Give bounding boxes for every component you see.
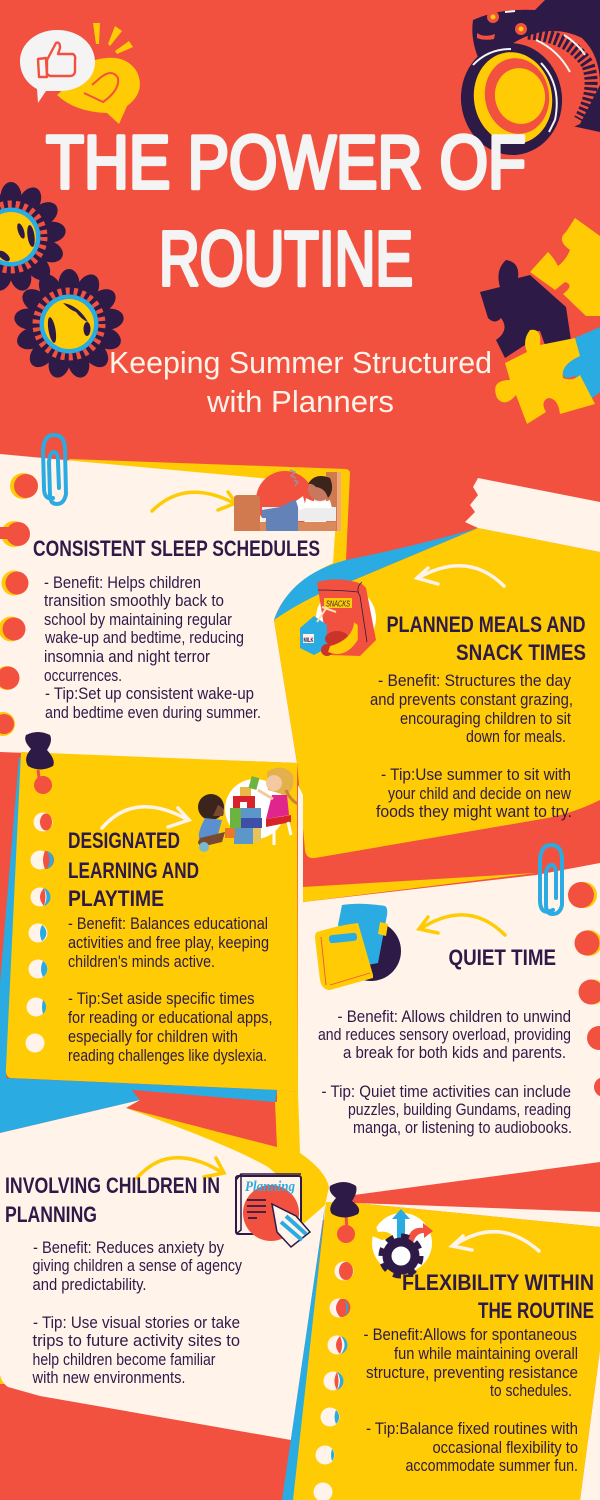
cream sheet xyxy=(0,1100,325,1440)
body text xyxy=(68,915,272,1065)
icon: planning notebook: Planning xyxy=(245,1179,295,1195)
red ribbon xyxy=(126,1090,277,1147)
body text: manga, or listening to audiobooks. xyxy=(353,1119,572,1137)
panel: consistent sleep schedules xyxy=(0,435,350,763)
body text: - Benefit: Helps children xyxy=(44,574,201,592)
body text: fun while maintaining overall xyxy=(394,1345,578,1363)
arrow xyxy=(102,807,189,828)
body text: insomnia and night terror xyxy=(44,648,210,666)
yellow corner sliver xyxy=(0,1370,5,1384)
body text: help children become familiar xyxy=(32,1351,216,1369)
title: ROUTINE xyxy=(159,216,413,302)
blue edge xyxy=(0,757,22,1080)
body text xyxy=(370,672,573,821)
body text: for reading or educational apps, xyxy=(68,1009,272,1027)
body text: - Benefit: Balances educational xyxy=(68,915,268,933)
body text: and bedtime even during summer. xyxy=(45,704,261,722)
icon: flower left xyxy=(0,182,67,293)
icon: puzzle pieces xyxy=(480,218,600,424)
body text: wake-up and bedtime, reducing xyxy=(44,629,244,647)
body text: giving children a sense of agency xyxy=(32,1257,243,1275)
panel: quiet time xyxy=(298,785,600,1220)
body text: reading challenges like dyslexia. xyxy=(68,1047,267,1065)
icon: snack bag and milk xyxy=(300,579,376,656)
body text: - Benefit: Structures the day xyxy=(378,672,572,690)
body text: occasional flexibility to xyxy=(432,1439,578,1457)
panel backing xyxy=(69,459,350,600)
icon: flower lower xyxy=(13,269,125,380)
body text: - Tip:Balance fixed routines with xyxy=(366,1420,578,1438)
tape xyxy=(465,478,600,552)
icon: gear with arrows xyxy=(372,1209,433,1276)
body text: - Tip: Use visual stories or take xyxy=(33,1314,240,1332)
body text: - Benefit: Reduces anxiety by xyxy=(33,1239,225,1257)
arrow xyxy=(152,492,236,511)
blue ribbon xyxy=(0,1078,277,1133)
icon: snack bag and milk: MILK xyxy=(304,637,314,644)
cream sheet xyxy=(298,785,600,1220)
body text: especially for children with xyxy=(68,1028,238,1046)
body text xyxy=(364,1326,578,1475)
body text: - Tip:Set aside specific times xyxy=(68,990,254,1008)
body text xyxy=(44,574,261,722)
arrow xyxy=(419,915,505,935)
body text xyxy=(32,1239,243,1387)
icon: pushpin xyxy=(330,1182,359,1243)
subtitle: Keeping Summer Structured xyxy=(109,345,492,380)
arrow xyxy=(452,1232,539,1251)
heading xyxy=(68,828,199,911)
yellow strip xyxy=(303,873,536,902)
binding holes xyxy=(26,812,54,1052)
body text: school by maintaining regular xyxy=(44,611,232,629)
arrow xyxy=(417,566,504,586)
body text: with new environments. xyxy=(32,1369,186,1387)
body text: foods they might want to try. xyxy=(376,803,572,821)
body text: activities and free play, keeping xyxy=(68,934,269,952)
body text: and predictability. xyxy=(32,1276,146,1294)
body text: structure, preventing resistance xyxy=(366,1364,578,1382)
arrow xyxy=(137,1158,224,1178)
heading: INVOLVING CHILDREN IN xyxy=(5,1173,220,1198)
icon: paperclip xyxy=(540,845,562,914)
icon: thumbs up and heart speech bubbles xyxy=(20,23,140,124)
body text: encouraging children to sit xyxy=(400,710,571,728)
heading xyxy=(402,1270,594,1323)
icon: camera xyxy=(455,0,600,160)
body text: down for meals. xyxy=(466,728,566,746)
body text: and prevents constant grazing, xyxy=(370,691,573,709)
subtitle: with Planners xyxy=(206,384,394,419)
icon: pushpin xyxy=(25,732,54,794)
icon: books xyxy=(315,904,401,990)
heading: PLANNING xyxy=(5,1202,97,1227)
binding holes xyxy=(314,1262,354,1500)
body text xyxy=(318,1008,572,1137)
cream corner xyxy=(580,1350,600,1500)
body text: - Tip: Quiet time activities can include xyxy=(322,1083,571,1101)
paper sheet xyxy=(0,454,338,763)
body text: a break for both kids and parents. xyxy=(343,1044,566,1062)
body text: children's minds active. xyxy=(68,953,215,971)
icon: sleeping child xyxy=(234,470,341,531)
panel: involving children in planning xyxy=(0,1078,329,1440)
icon: planning notebook xyxy=(236,1174,310,1247)
title xyxy=(46,120,526,302)
heading: PLAYTIME xyxy=(68,886,164,911)
body text: - Benefit: Allows children to unwind xyxy=(338,1008,571,1026)
heading xyxy=(386,612,586,665)
icon: snack bag and milk: SNACKS xyxy=(326,600,350,608)
icon: children playing with blocks xyxy=(198,768,298,852)
blue edge xyxy=(282,1205,325,1500)
heading: CONSISTENT SLEEP SCHEDULES xyxy=(33,536,320,561)
icon: paperclip xyxy=(43,435,66,504)
body text: - Tip:Use summer to sit with xyxy=(381,766,571,784)
panel: flexibility within the routine xyxy=(282,1182,600,1500)
body text: trips to future activity sites to xyxy=(32,1332,240,1350)
body text: to schedules. xyxy=(490,1382,572,1400)
heading: LEARNING AND xyxy=(68,858,199,883)
body text: occurrences. xyxy=(44,667,122,685)
yellow sheet xyxy=(6,752,298,1092)
panel: planned meals and snack times xyxy=(274,478,600,858)
body text: transition smoothly back to xyxy=(44,592,224,610)
body text: your child and decide on new xyxy=(388,785,571,803)
yellow backing xyxy=(126,1090,329,1230)
body text: - Tip:Set up consistent wake-up xyxy=(45,685,254,703)
heading xyxy=(5,1173,220,1227)
yellow sheet xyxy=(293,1202,600,1500)
blue swoosh xyxy=(274,528,478,622)
yellow sheet xyxy=(274,528,600,858)
subtitle xyxy=(109,345,492,419)
panel: designated learning and playtime xyxy=(0,732,298,1092)
binding holes xyxy=(0,473,38,736)
heading: QUIET TIME xyxy=(448,945,556,970)
binding holes xyxy=(568,882,600,1097)
body text: accommodate summer fun. xyxy=(406,1457,578,1475)
body text: - Benefit:Allows for spontaneous xyxy=(364,1326,577,1344)
heading: DESIGNATED xyxy=(68,828,180,853)
cream wedge xyxy=(356,1203,600,1227)
